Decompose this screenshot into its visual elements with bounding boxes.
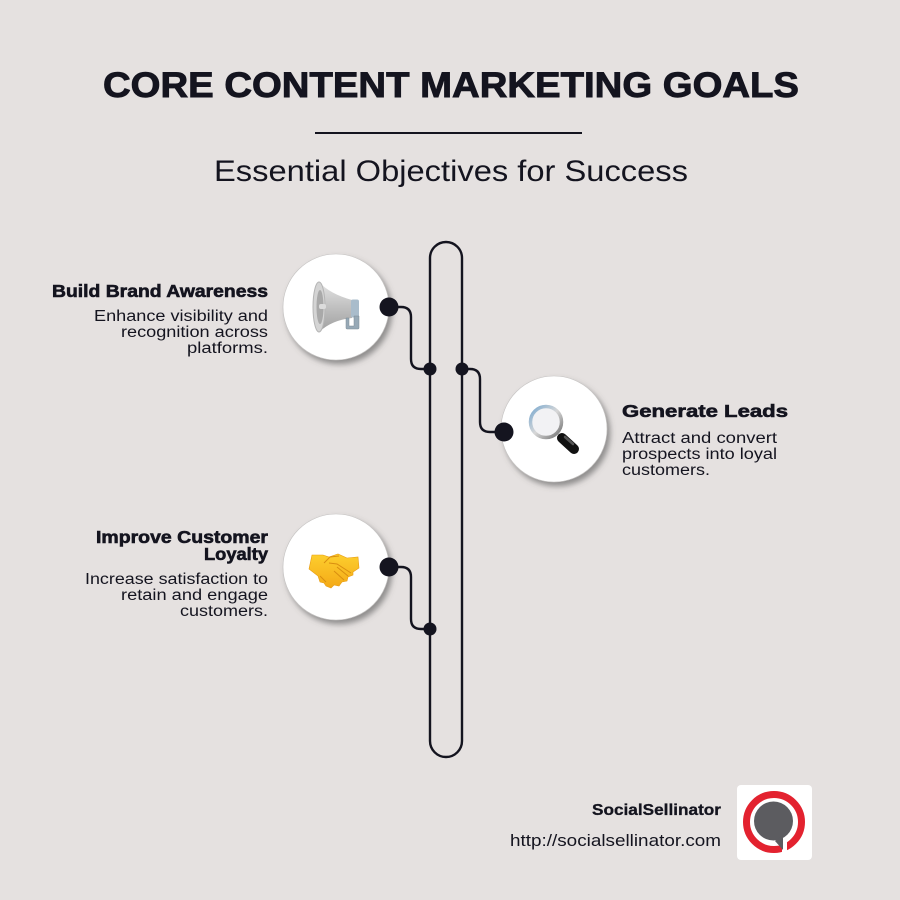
icon circle: magnifying glass: [494, 376, 607, 482]
text block: Improve Customer Loyalty: Loyalty: [204, 544, 268, 564]
text block: Build Brand Awareness: platforms.: [187, 340, 268, 357]
text block: Improve Customer Loyalty: [85, 527, 268, 620]
footer brand name: SocialSellinator: [592, 802, 721, 819]
text block: Improve Customer Loyalty: Improve Customer: [96, 527, 268, 547]
logo: [737, 785, 812, 860]
title: CORE CONTENT MARKETING GOALS: [103, 65, 799, 105]
icon: handshake: [309, 554, 359, 588]
footer url: http://socialsellinator.com: [510, 832, 721, 850]
subtitle: Essential Objectives for Success: [214, 155, 688, 188]
text block: Generate Leads: Generate Leads: [622, 401, 788, 421]
central timeline track: [430, 242, 462, 757]
text block: Build Brand Awareness: Enhance visibility and: [94, 308, 268, 325]
connector: customer loyalty: [389, 567, 436, 636]
icon: magnifying glass: [530, 406, 574, 449]
text block: Improve Customer Loyalty: Increase satisfaction to: [85, 571, 268, 588]
icon circle: handshake: [283, 514, 398, 620]
icon circle: megaphone: [283, 254, 398, 360]
icon: megaphone: [313, 282, 359, 332]
text block: Build Brand Awareness: [52, 281, 268, 357]
text block: Generate Leads: Attract and convert: [622, 430, 778, 447]
text block: Generate Leads: customers.: [622, 462, 710, 479]
connector: brand awareness: [389, 307, 436, 376]
text block: Generate Leads: prospects into loyal: [622, 446, 777, 463]
text block: Improve Customer Loyalty: retain and engage: [121, 587, 268, 604]
text block: Improve Customer Loyalty: customers.: [180, 603, 268, 620]
text block: Generate Leads: [622, 401, 788, 479]
text block: Build Brand Awareness: recognition across: [121, 324, 268, 341]
text block: Build Brand Awareness: Build Brand Awareness: [52, 281, 268, 301]
connector: generate leads: [456, 362, 504, 432]
